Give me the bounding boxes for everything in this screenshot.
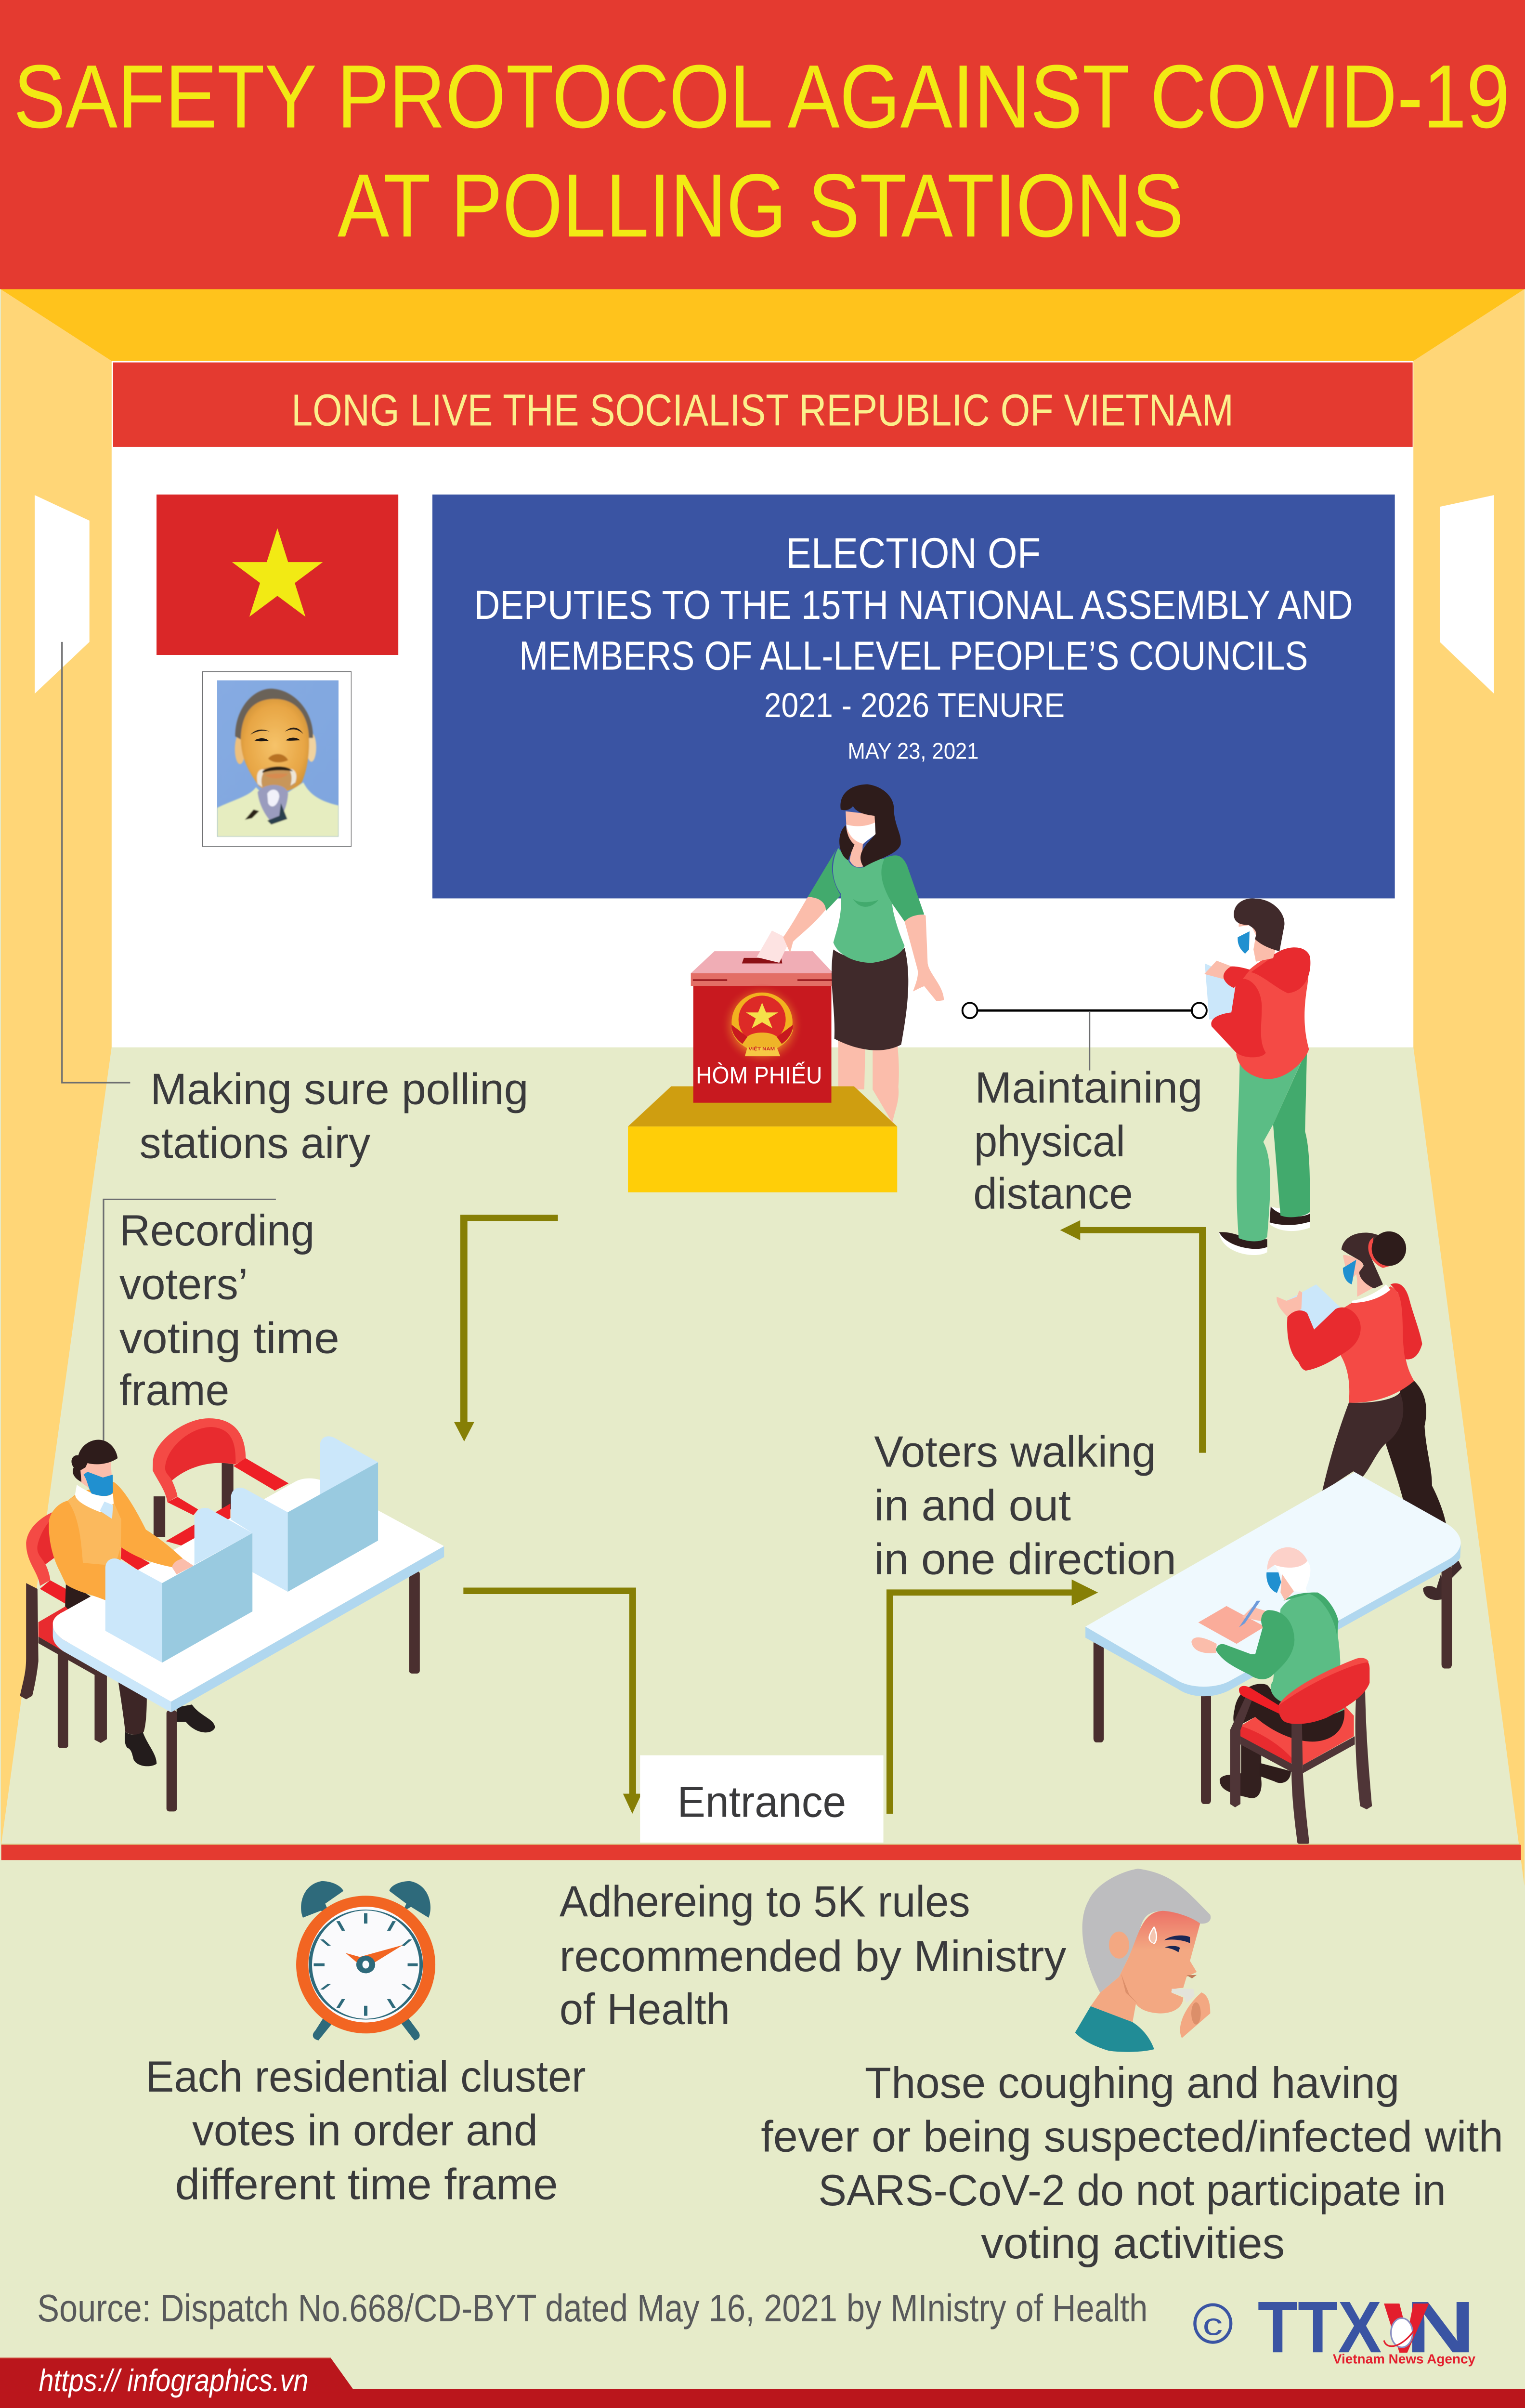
trousers: [1237, 1051, 1306, 1241]
hoodie: [1235, 948, 1309, 1079]
footer bar: [0, 2357, 1525, 2408]
floor edge strip: [1, 1844, 1521, 1860]
left desk: recording voters: [20, 1418, 444, 1811]
election line 2: DEPUTIES TO THE 15TH NATIONAL ASSEMBLY AND: [474, 582, 1353, 628]
election panel: [432, 495, 1395, 898]
election line 3: MEMBERS OF ALL-LEVEL PEOPLE’S COUNCILS: [519, 633, 1308, 678]
label: physical distance: [973, 1063, 1203, 1218]
left window: [35, 495, 90, 694]
hood and sleeves: [1211, 947, 1310, 1057]
paper: [1205, 964, 1236, 1020]
clock ticks: [322, 1913, 410, 2016]
standing woman in red: [1277, 1231, 1462, 1600]
shirt: [100, 1502, 113, 1519]
portrait of President Ho Chi Minh: [203, 672, 351, 847]
election heading: ELECTION OF: [786, 529, 1041, 577]
distance connector: [963, 1003, 1207, 1071]
backrest highlight: [1278, 1658, 1369, 1705]
label: airy: stations airy: [140, 1119, 371, 1167]
seat shadow: [1240, 1726, 1292, 1765]
globe: [1391, 2318, 1413, 2347]
chair rails: [1240, 1736, 1355, 1773]
sweat drop: [1149, 1927, 1157, 1944]
blue mask: [1343, 1260, 1356, 1284]
face: [1091, 1911, 1200, 2022]
right wall: [1413, 288, 1525, 1886]
desk front leg: [167, 1710, 177, 1811]
label: airy: Making sure polling: [150, 1065, 529, 1114]
ear: [1109, 1932, 1129, 1959]
back leg: [1386, 1381, 1447, 1529]
label: physical distance: physical: [974, 1117, 1125, 1166]
thighs: [1233, 1684, 1344, 1741]
text: coughing and fever: voting activities: [981, 2219, 1285, 2268]
TTXVN logo: [1258, 2287, 1475, 2368]
slogan banner: [113, 363, 1413, 447]
woman legs: [838, 1037, 899, 1123]
fingers: [1191, 2002, 1201, 2025]
lower legs and shoes: [1220, 1738, 1262, 1798]
ballot paper: [756, 930, 790, 963]
connector: airy: [62, 642, 130, 1083]
pen: [1239, 1601, 1260, 1627]
text: residential cluster: different time frame: [175, 2160, 558, 2209]
neck: [1280, 1574, 1294, 1601]
back wall: [112, 359, 1413, 1047]
rear divider: [231, 1436, 378, 1592]
table edge: [1085, 1543, 1461, 1696]
desk side left: [53, 1623, 171, 1712]
text: coughing and fever: [761, 2058, 1503, 2268]
source: Source: Dispatch No.668/CD-BYT dated May 16, 2021 by MInistry of Health: [37, 2286, 1147, 2329]
right window: [1440, 495, 1494, 694]
label: recording: [119, 1206, 339, 1415]
hair: [839, 785, 901, 867]
body: [1271, 1593, 1344, 1717]
label: physical distance: distance: [973, 1169, 1133, 1218]
skirt: [832, 948, 908, 1050]
clock hub centre: [363, 1961, 369, 1969]
TTXVN logo: TTX: [1258, 2287, 1382, 2368]
blouse: [833, 848, 905, 963]
rear chair: [153, 1418, 289, 1545]
trousers and shoes: [65, 1580, 215, 1766]
arrow: top right to voting area: [1060, 1220, 1206, 1453]
hand: [1277, 1291, 1302, 1317]
label: airy: [140, 1065, 529, 1167]
shoes behind table: [1423, 1561, 1462, 1600]
label: physical distance: Maintaining: [975, 1063, 1203, 1112]
white mask: [846, 823, 876, 844]
label: one direction: in and out: [874, 1481, 1071, 1530]
text: coughing and fever: Those coughing and having: [865, 2058, 1399, 2107]
right table with seated voter: [1085, 1472, 1461, 1846]
label: one direction: in one direction: [874, 1535, 1176, 1584]
footer top edge: [0, 2357, 331, 2358]
desk legs: [409, 1571, 420, 1674]
hair: [71, 1440, 117, 1482]
clock hub: [356, 1956, 375, 1973]
copyright symbol: c: [1203, 2307, 1223, 2342]
voter woman and ballot box: [628, 930, 899, 1192]
jaw shadow: [1121, 1974, 1138, 2004]
shoes: [1219, 1207, 1310, 1255]
text: residential cluster: votes in order and: [192, 2106, 538, 2155]
hand: [1204, 961, 1231, 979]
collar: [75, 1485, 114, 1512]
platform: [628, 1086, 897, 1192]
text: residential cluster: Each residential cluster: [146, 2052, 586, 2101]
clock body: [296, 1896, 435, 2033]
top: [1339, 1286, 1414, 1403]
collar: [1352, 1284, 1390, 1303]
arrow: ballot to registration: [454, 1215, 558, 1441]
hand: [172, 1558, 194, 1574]
neck: [80, 1459, 112, 1499]
label: recording: Recording: [119, 1206, 314, 1255]
orbit: [1384, 2311, 1424, 2346]
eye: [1165, 1946, 1180, 1952]
table top: [1085, 1472, 1461, 1687]
copyright symbol: [1195, 2305, 1231, 2343]
label: recording: voters’: [119, 1260, 248, 1309]
text: 5K rules: [560, 1877, 1067, 2034]
ceiling: [0, 288, 1525, 361]
paper on table: [1198, 1606, 1265, 1644]
arrow: registration to entrance: [463, 1588, 641, 1814]
face: [1238, 921, 1276, 962]
sleeves: [1287, 1283, 1422, 1371]
hand: [1180, 1992, 1210, 2038]
face and neck: [846, 811, 875, 867]
chair seat: [1240, 1705, 1354, 1765]
arrow: entrance to table: [886, 1580, 1098, 1814]
second shoe: [1260, 1763, 1291, 1783]
bells and feet: [301, 1881, 430, 2041]
chair arm: [1239, 1686, 1279, 1714]
coughing man icon: [1075, 1869, 1211, 2052]
emblem ribbon text: VIỆT NAM: [749, 1046, 775, 1052]
label: one direction: [874, 1427, 1176, 1584]
text: 5K rules: recommended by Ministry: [560, 1932, 1067, 1981]
blue mask: [1238, 931, 1250, 954]
eyebrow: [1164, 1936, 1190, 1943]
face: [1343, 1255, 1365, 1286]
header panel: [0, 0, 1525, 289]
chair front legs: [1230, 1691, 1372, 1846]
neck: [1357, 1278, 1374, 1296]
blue mask: [83, 1472, 113, 1496]
national emblem: [720, 983, 804, 1066]
arm: [1216, 1610, 1294, 1679]
table legs: [1094, 1566, 1452, 1804]
website link: https:// infographics.vn: [39, 2363, 308, 2398]
national flag: [156, 495, 398, 655]
nostril: [1186, 1975, 1197, 1978]
voter hands: [1191, 1607, 1265, 1653]
slogan text: LONG LIVE THE SOCIALIST REPUBLIC OF VIETNAM: [291, 385, 1234, 435]
text: coughing and fever: SARS-CoV-2 do not participate in: [818, 2166, 1446, 2215]
cough: [1172, 1989, 1195, 2003]
left arm: [783, 897, 826, 953]
label: one direction: Voters walking: [874, 1427, 1156, 1476]
head: [1267, 1547, 1307, 1570]
front leg: [1322, 1392, 1403, 1492]
alarm clock icon: [296, 1881, 435, 2041]
text: 5K rules: Adhereing to 5K rules: [560, 1877, 970, 1926]
entrance sign: [640, 1755, 884, 1843]
paper: [1287, 1284, 1340, 1330]
sweater: [49, 1482, 182, 1600]
right arm: [905, 914, 944, 1001]
hair: [1342, 1232, 1386, 1288]
entrance label: Entrance: [677, 1778, 846, 1826]
date: MAY 23, 2021: [848, 738, 978, 764]
TTXVN logo: N: [1406, 2287, 1475, 2368]
text: 5K rules: of Health: [560, 1985, 730, 2034]
chair backrest: [1278, 1659, 1369, 1724]
clock face: [311, 1910, 421, 2019]
shoulder: [1283, 1593, 1339, 1636]
sweater vest: [67, 1495, 121, 1566]
agency name: Vietnam News Agency: [1333, 2351, 1475, 2366]
ballot box label: HÒM PHIẾU: [696, 1061, 822, 1088]
standing man in red hoodie: [1204, 898, 1310, 1255]
desk top: [53, 1479, 444, 1701]
title line 2: AT POLLING STATIONS: [338, 155, 1184, 256]
ballot box: [691, 930, 834, 1103]
blue mask: [1266, 1572, 1281, 1593]
desk side right: [171, 1546, 444, 1712]
sleeves: [808, 846, 924, 921]
tenure: 2021 - 2026 TENURE: [764, 686, 1065, 725]
text: coughing and fever: fever or being suspected/infected with: [761, 2112, 1503, 2161]
front chair: [20, 1512, 160, 1748]
text: residential cluster: [146, 2052, 586, 2209]
bun: [1372, 1231, 1406, 1266]
label: recording: voting time: [119, 1314, 339, 1362]
hair: [1082, 1869, 1211, 1993]
front leg over platform: [873, 1086, 899, 1123]
left wall: [1, 288, 112, 1845]
front divider: [105, 1508, 252, 1662]
flag star: [232, 528, 323, 617]
clock hands: [345, 1945, 403, 1965]
shirt: [1075, 2006, 1154, 2052]
hair band: [1368, 1237, 1390, 1268]
connector: time frame: [104, 1199, 276, 1440]
clock inner ring: [308, 1907, 423, 2022]
hair: [1234, 898, 1284, 951]
label: recording: frame: [119, 1366, 229, 1415]
clock hour marks: [314, 1963, 418, 1966]
red V: [1384, 2303, 1429, 2353]
white hair: [1275, 1561, 1310, 1593]
